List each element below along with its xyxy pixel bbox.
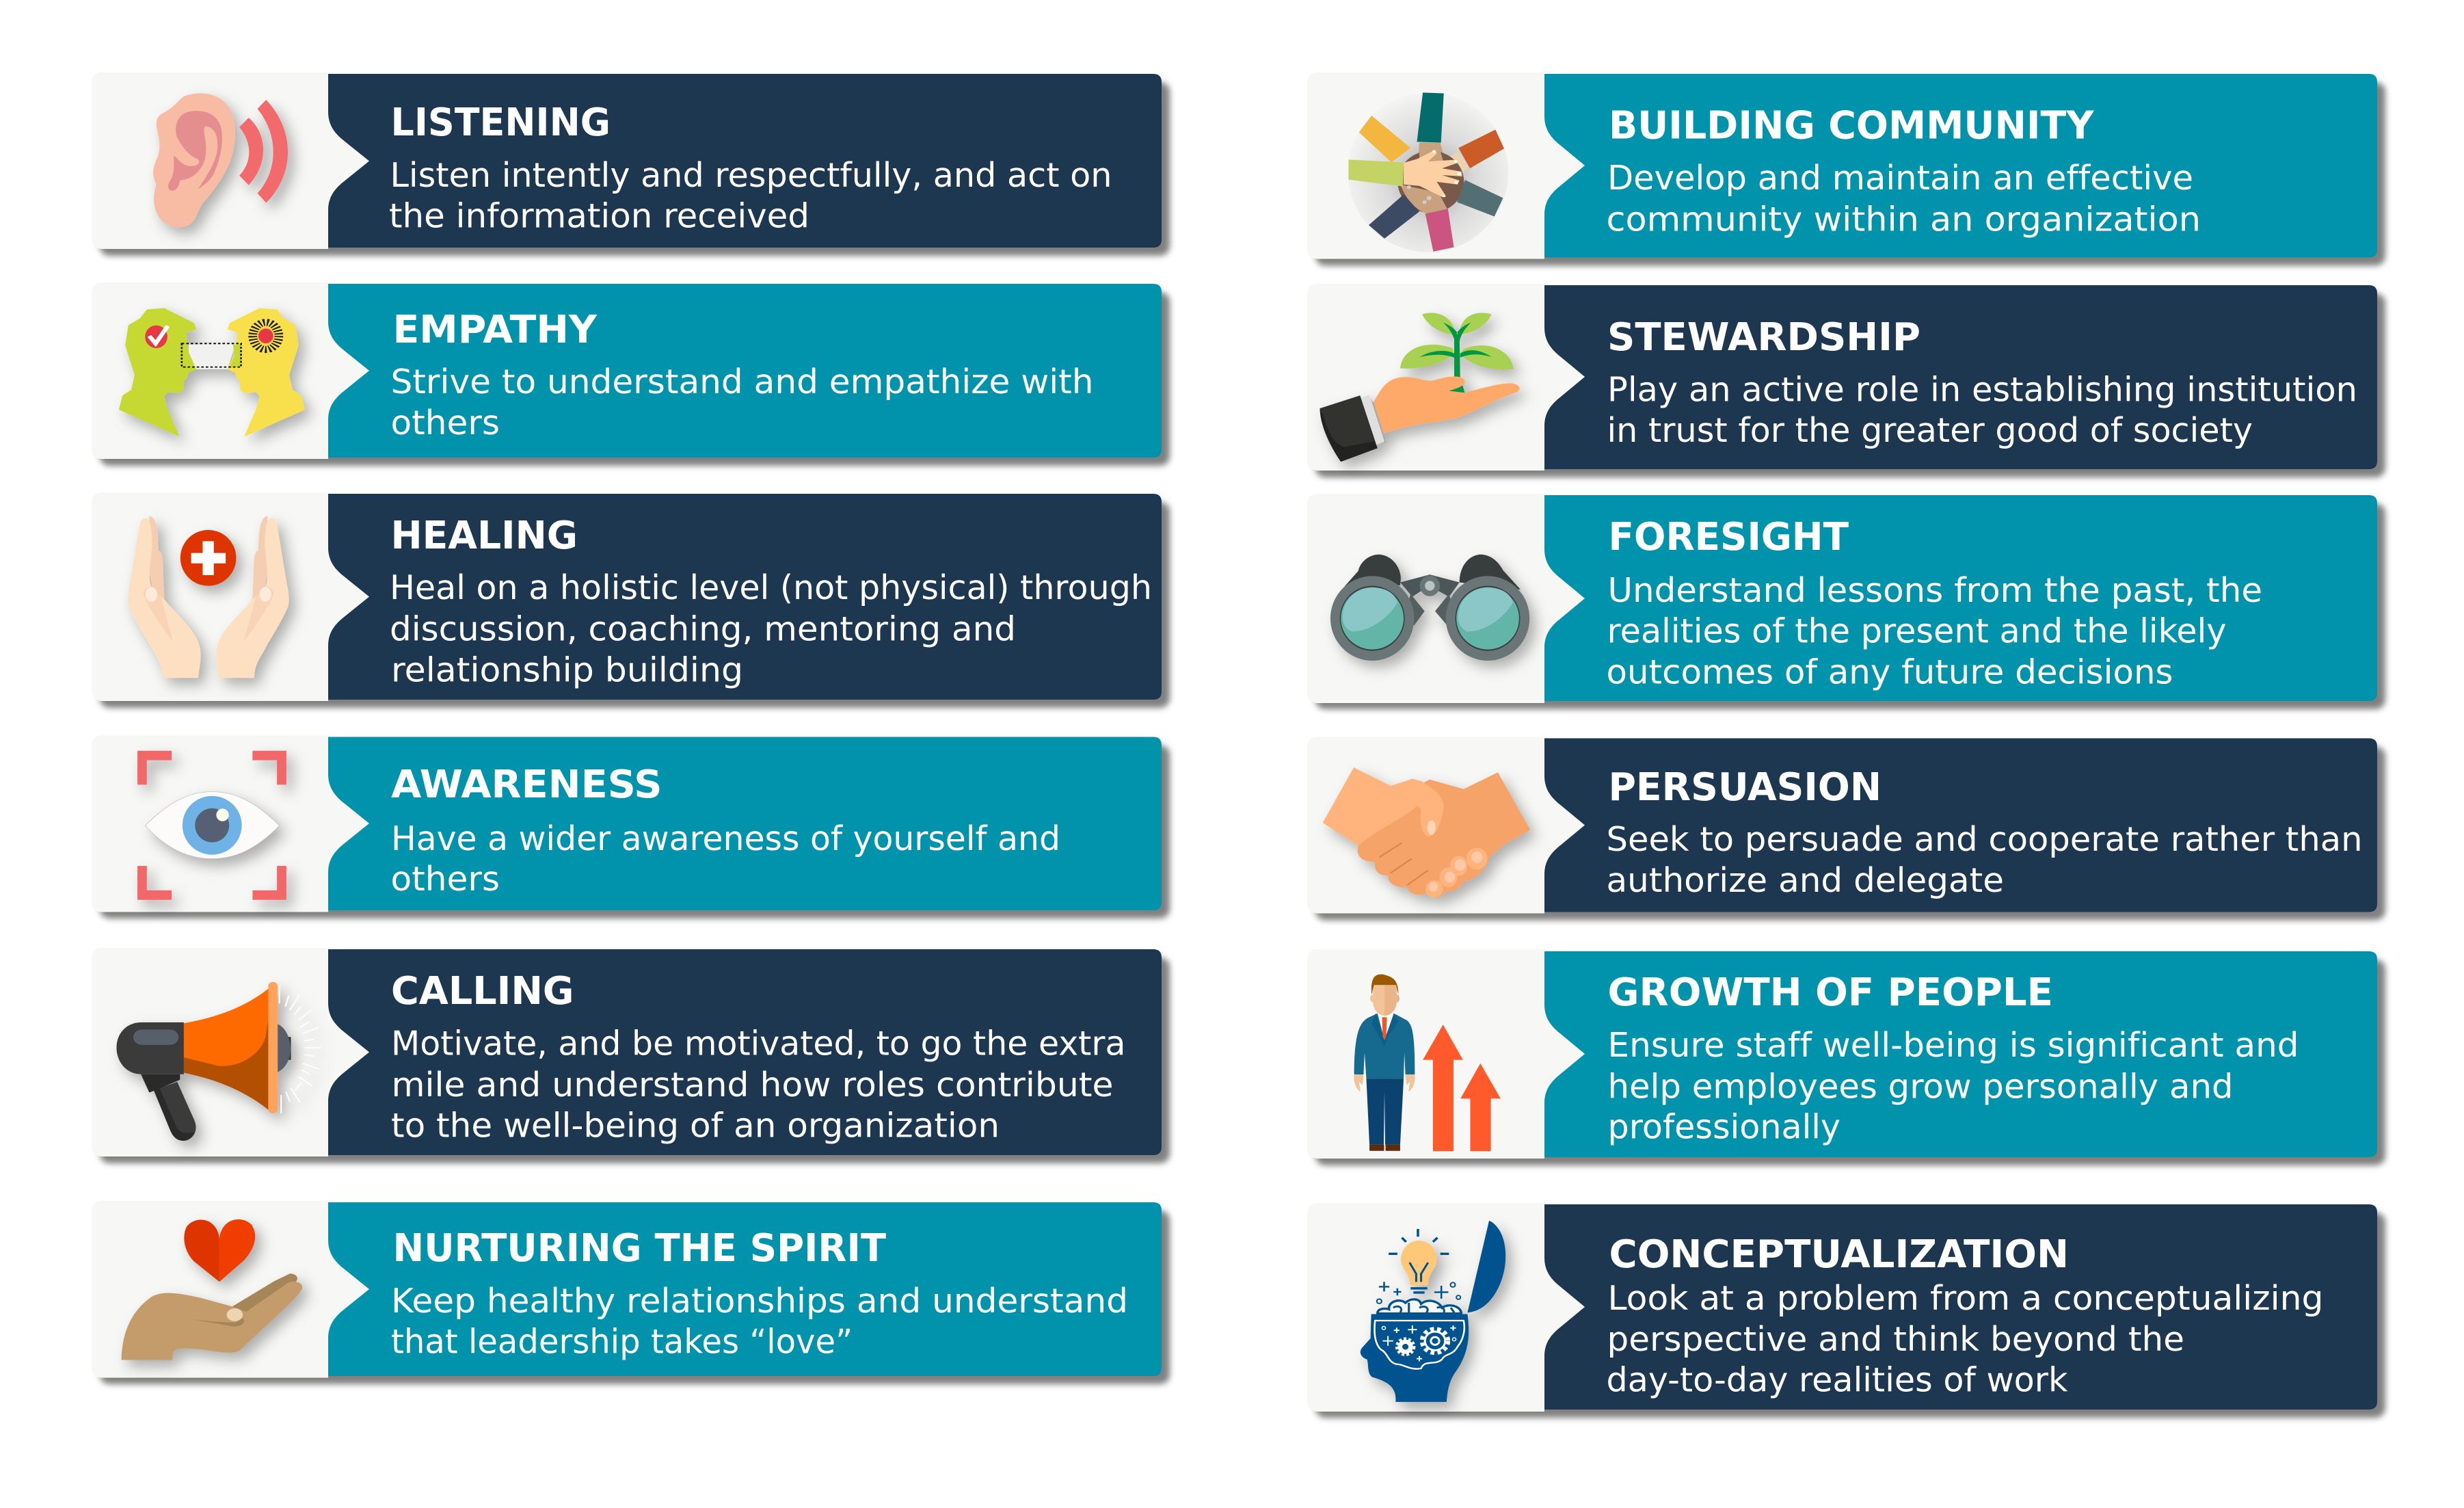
description: Keep healthy relationships and understand [391,1282,1128,1321]
description: realities of the present and the likely [1607,611,2226,651]
description: Ensure staff well-being is significant and [1608,1026,2299,1065]
title: PERSUASION [1608,765,1882,810]
icon: megaphone [116,982,321,1141]
icon: open head with gears and light bulb [1361,1221,1505,1402]
description: Have a wider awareness of yourself and [391,819,1060,858]
description: Listen intently and respectfully, and act on [390,156,1112,195]
description: that leadership takes “love” [391,1323,853,1361]
title: STEWARDSHIP [1607,315,1920,360]
description: relationship building [391,651,743,689]
description [391,1024,1125,1145]
description: Motivate, and be motivated, to go the extra [391,1024,1125,1063]
title: LISTENING [391,101,611,145]
description: day-to-day realities of work [1607,1361,2068,1399]
title: EMPATHY [392,308,598,352]
description [1607,159,2201,239]
title: GROWTH OF PEOPLE [1608,970,2053,1015]
description: to the well-being of an organization [391,1107,1000,1145]
description: Look at a problem from a conceptualizing [1608,1279,2323,1318]
description [1608,1026,2299,1146]
panel: conceptualization [1307,1203,2385,1418]
description: Understand lessons from the past, the [1608,571,2262,610]
icon: hand holding a seedling [1320,313,1520,462]
description [1607,571,2262,692]
title: AWARENESS [391,763,662,807]
panel: awareness [92,735,1170,918]
description [389,156,1112,235]
description: Develop and maintain an effective [1607,159,2193,198]
panel: stewardship [1307,284,2385,477]
description: professionally [1608,1108,1840,1146]
description [391,1282,1128,1361]
title: FORESIGHT [1608,515,1849,559]
icon: heart above open hand [122,1219,302,1360]
description: discussion, coaching, mentoring and [390,610,1016,648]
description: mile and understand how roles contribute [391,1066,1113,1104]
description: perspective and think beyond the [1607,1320,2184,1359]
icon: hands and medical cross [128,516,289,678]
description: the information received [389,197,809,235]
description [1607,1279,2323,1399]
icon: two heads [119,308,305,436]
description [1607,820,2363,900]
description [391,362,1094,442]
panel: empathy [92,282,1170,466]
title: CONCEPTUALIZATION [1609,1232,2069,1277]
icon: eye in focus brackets [137,751,286,900]
description: authorize and delegate [1607,861,2004,900]
panel: building community [1307,72,2385,265]
title: NURTURING THE SPIRIT [392,1226,886,1271]
icon: binoculars [1330,555,1529,661]
panel: persuasion [1307,737,2385,921]
panel: foresight [1307,494,2385,709]
description: community within an organization [1607,200,2201,239]
icon: businessman and growth arrows [1354,975,1501,1151]
panel: nurturing the spirit [92,1201,1170,1384]
title: BUILDING COMMUNITY [1609,104,2095,148]
title: CALLING [391,969,574,1014]
description [390,568,1152,689]
title: HEALING [391,514,578,558]
description [391,819,1060,899]
description: in trust for the greater good of society [1607,411,2253,450]
panel: growth of people [1307,949,2385,1165]
description: others [391,404,500,442]
icon: hands stacked in a circle [1348,92,1508,252]
description: Strive to understand and empathize with [391,362,1094,401]
description: Seek to persuade and cooperate rather than [1607,820,2363,859]
icon: handshake [1323,767,1530,897]
description: others [391,860,500,899]
icon: ear with sound waves [153,94,288,227]
description [1607,371,2357,450]
description: help employees grow personally and [1608,1067,2233,1107]
description: Play an active role in establishing institution [1607,371,2357,409]
description: Heal on a holistic level (not physical) through [390,568,1152,607]
panel: calling [92,948,1170,1163]
description: outcomes of any future decisions [1607,652,2173,692]
panel: healing [92,492,1170,708]
panel: listening [92,72,1170,256]
